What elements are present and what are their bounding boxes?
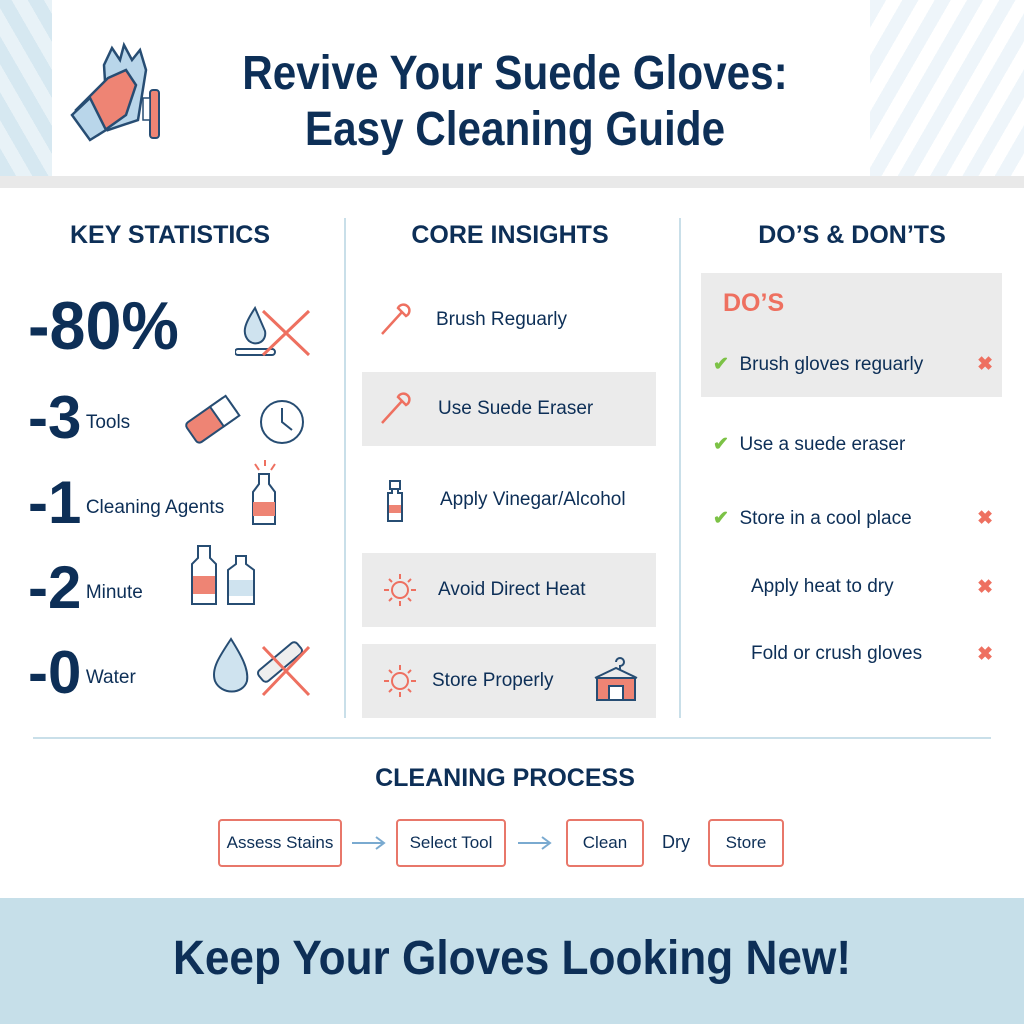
item: store cool: ✖ [977, 508, 993, 529]
step: select tool [396, 819, 506, 867]
item: brush gloves: ✖ [977, 354, 993, 375]
step: clean: Clean [583, 833, 627, 852]
icon: wardrobe [594, 657, 638, 701]
process flow [218, 819, 784, 867]
subheading: dos: DO’S [723, 289, 784, 317]
icon: drop with brush cross [213, 637, 310, 696]
insight: apply vinegar: Apply Vinegar/Alcohol [440, 489, 626, 510]
item: apply heat: ✖ [977, 577, 993, 598]
heading: cleaning process: CLEANING PROCESS [375, 764, 635, 792]
stat: 2 minute: -2 Minute [28, 554, 143, 621]
item: apply heat [751, 576, 993, 598]
insight: store properly [362, 644, 656, 718]
item: use suede eraser: ✔ Use a suede eraser [713, 434, 905, 455]
footer text: Keep Your Gloves Looking New! [173, 932, 851, 985]
arrow [518, 836, 552, 850]
insight: use suede eraser [362, 372, 656, 446]
insight: avoid direct heat: Avoid Direct Heat [438, 579, 586, 600]
footer banner [0, 898, 1024, 1024]
title: Easy Cleaning Guide [305, 103, 725, 156]
title [242, 47, 788, 156]
insight: brush regularly [381, 303, 567, 335]
do box [701, 273, 1002, 397]
arrow [352, 836, 386, 850]
heading: key statistics: KEY STATISTICS [70, 221, 270, 249]
stat: 0 water: -0 Water [28, 639, 136, 706]
item: apply heat: Apply heat to dry [751, 576, 894, 597]
stat: 3 tools: -3 Tools [28, 384, 130, 451]
icon: eraser and clock [185, 394, 304, 444]
step: clean [566, 819, 644, 867]
icon: gloves and brush [70, 42, 160, 142]
step: store: Store [726, 833, 766, 852]
header background pattern [0, 0, 52, 176]
step: dry: Dry [662, 832, 690, 852]
stat: 80%: -80% [28, 288, 179, 364]
insight: brush regularly: Brush Reguarly [436, 309, 567, 330]
divider [33, 737, 991, 739]
column dividers [344, 218, 346, 718]
step: assess stains: Assess Stains [227, 833, 333, 852]
heading: core insights: CORE INSIGHTS [411, 221, 609, 249]
panel: core insights [362, 221, 656, 718]
title: Revive Your Suede Gloves: [242, 47, 788, 100]
insight: apply vinegar [387, 480, 626, 522]
item: store cool: ✔ Store in a cool place [713, 508, 912, 529]
insight: store properly: Store Properly [432, 670, 553, 691]
panel: dos and donts [701, 221, 1002, 665]
insight: use suede eraser: Use Suede Eraser [438, 398, 593, 419]
icon: drop cross [235, 306, 310, 356]
stat: 1 cleaning agents: -1 Cleaning Agents [28, 469, 224, 536]
panel: key statistics [28, 221, 310, 706]
step: assess stains [218, 819, 342, 867]
item: fold gloves: ✖ [977, 644, 993, 665]
icon: bottle [252, 460, 276, 525]
insight: avoid direct heat [362, 553, 656, 627]
step: store [708, 819, 784, 867]
item: fold gloves [751, 643, 993, 665]
item: fold gloves: Fold or crush gloves [751, 643, 922, 664]
icon: bottles [191, 545, 255, 605]
step: select tool: Select Tool [410, 833, 492, 852]
heading: dos and donts: DO’S & DON’TS [758, 221, 946, 249]
grey band [0, 176, 1024, 188]
item: brush gloves: ✔ Brush gloves reguarly [713, 354, 923, 375]
